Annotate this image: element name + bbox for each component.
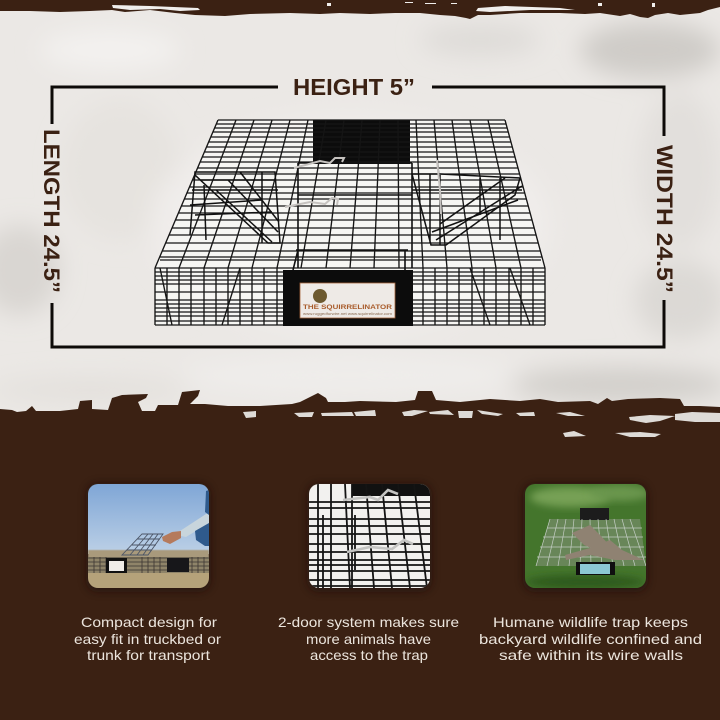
top torn brown border bbox=[0, 0, 720, 19]
label: height: HEIGHT 5” bbox=[293, 74, 415, 100]
caption: humane trap: safe within its wire walls bbox=[499, 647, 683, 663]
center door frame bbox=[293, 163, 412, 270]
back door panel bbox=[313, 120, 410, 164]
caption: 2-door system: 2-door system makes sure bbox=[278, 614, 459, 630]
sky bbox=[88, 484, 209, 554]
wire trap photo bbox=[155, 120, 545, 326]
label: width: WIDTH 24.5” bbox=[652, 145, 677, 293]
label name: THE SQUIRRELINATOR bbox=[303, 305, 393, 311]
hand bbox=[162, 531, 181, 544]
caption: 2-door system: access to the trap bbox=[310, 647, 428, 663]
caption: compact design: Compact design for bbox=[81, 614, 217, 630]
dimension frame bbox=[52, 87, 664, 347]
horizon bbox=[88, 549, 209, 557]
label url: www.ruggedfurwire.net www.squirrelinator.com bbox=[303, 312, 392, 316]
front label plate bbox=[283, 270, 413, 326]
grass bbox=[525, 484, 646, 588]
trap interior bbox=[155, 120, 545, 325]
grass bbox=[88, 573, 209, 588]
label: length: LENGTH 24.5” bbox=[39, 129, 64, 293]
front wire grid bbox=[155, 268, 545, 325]
caption: humane trap: Humane wildlife trap keeps bbox=[493, 614, 688, 630]
left funnel door bbox=[190, 172, 280, 243]
product label bbox=[300, 283, 395, 318]
caption: compact design: trunk for transport bbox=[87, 647, 210, 663]
arm bbox=[180, 513, 209, 537]
door panel bbox=[352, 484, 430, 496]
trap in field bbox=[88, 557, 209, 574]
bottom torn brown panel bbox=[0, 390, 720, 720]
caption: humane trap bbox=[479, 614, 702, 663]
jeans bbox=[195, 490, 209, 546]
photo card: 2-door system bbox=[307, 483, 432, 592]
top wire grid bbox=[155, 120, 545, 268]
squirrels bbox=[565, 525, 644, 560]
close-up wires bbox=[309, 484, 430, 588]
caption: compact design bbox=[74, 614, 221, 663]
caption: 2-door system bbox=[278, 614, 459, 663]
caption: humane trap: backyard wildlife confined and bbox=[479, 631, 702, 647]
latches bbox=[343, 490, 413, 552]
label plate bbox=[576, 562, 615, 575]
latches bbox=[285, 158, 441, 214]
label emblem bbox=[313, 289, 327, 303]
cage bbox=[536, 519, 646, 566]
lifted wire door bbox=[122, 534, 163, 555]
paper background bbox=[0, 0, 720, 420]
caption: 2-door system: more animals have bbox=[306, 631, 431, 647]
right funnel door bbox=[412, 174, 522, 245]
caption: compact design: easy fit in truckbed or bbox=[74, 631, 221, 647]
photo card: humane trap bbox=[523, 483, 650, 592]
photo card: compact design bbox=[86, 483, 211, 592]
